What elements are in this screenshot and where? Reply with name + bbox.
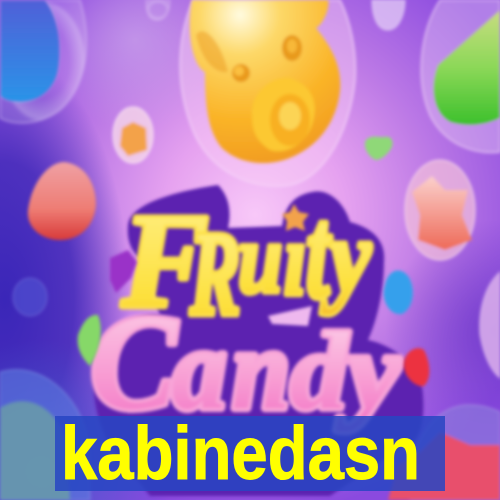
logo: Candy xyxy=(90,286,401,438)
icon: faint left bubble xyxy=(13,278,47,316)
logo letter r: R xyxy=(189,208,241,340)
logo letter u: u xyxy=(238,203,282,314)
icon: right edge bubble xyxy=(480,272,500,378)
logo letter d: d xyxy=(290,310,349,432)
icon: bottom-right bubble with red candy xyxy=(388,405,500,500)
caption banner xyxy=(55,416,445,491)
icon: small top bubbles xyxy=(146,0,405,30)
logo: star over i xyxy=(282,204,309,231)
icon: green candy in bubble xyxy=(421,0,500,153)
logo letter y: y xyxy=(321,200,372,315)
logo letter n: n xyxy=(232,307,290,433)
icon: red candy xyxy=(28,162,96,240)
icon: green heart xyxy=(365,137,392,160)
logo letter a: a xyxy=(172,308,227,434)
icon: pink star bubble xyxy=(405,160,475,260)
logo: purple backing xyxy=(93,185,423,496)
logo: pale gap under Fruity xyxy=(268,306,312,326)
logo letter i: ı xyxy=(284,202,306,318)
logo letter C: C xyxy=(90,286,179,438)
logo: Fruity xyxy=(121,184,372,340)
icon: green leaf xyxy=(78,315,101,366)
icon: bear candy in bubble xyxy=(180,0,355,186)
icon: blue candy in bubble xyxy=(0,0,86,123)
icon: small orange bubble xyxy=(113,107,153,163)
logo letter t: t xyxy=(306,184,332,324)
icon: bottom-left bubble with green candy xyxy=(0,370,90,500)
icon: grapes xyxy=(110,250,137,293)
logo letter y: y xyxy=(336,310,401,432)
icon: strawberry xyxy=(404,348,429,386)
logo letter F: F xyxy=(121,186,209,336)
icon: blue jelly xyxy=(384,270,413,314)
